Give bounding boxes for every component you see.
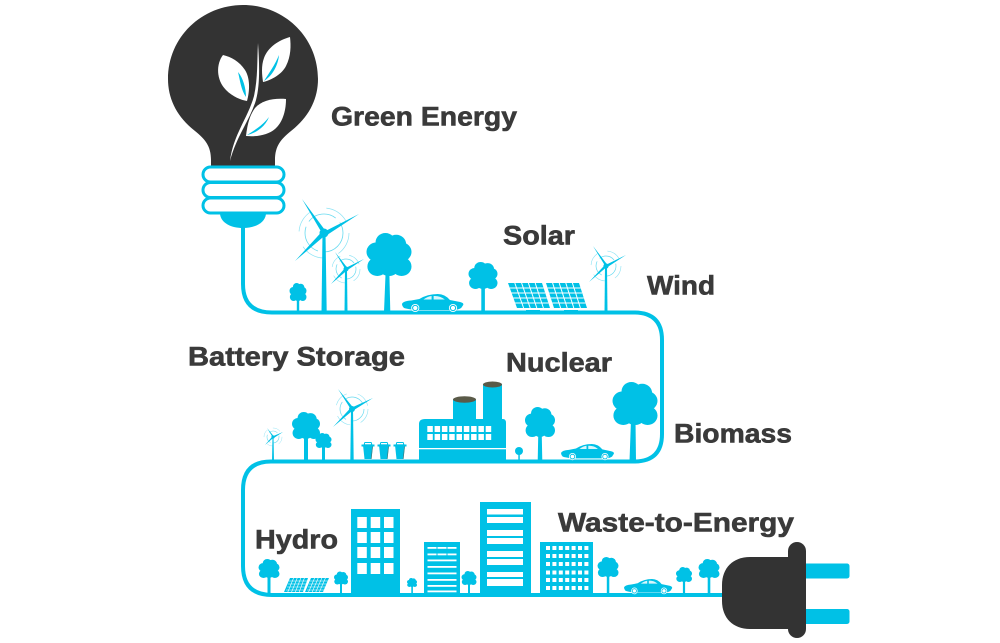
large wind turbine [295,199,359,312]
solar panel [546,283,587,312]
light bulb [168,5,318,228]
electric plug [722,542,850,638]
chimney [483,382,502,424]
label: Waste-to-Energy: Waste-to-Energy [558,508,794,538]
tree [676,567,692,595]
power cable [243,226,730,595]
label: Wind: Wind [647,270,715,300]
leaf left [218,55,249,101]
tree [292,412,320,461]
factory windows [427,426,491,440]
solar panel [508,283,550,312]
car [624,579,672,594]
bin [362,442,374,459]
tree [698,559,720,595]
plug prong [800,564,850,578]
tiny tree [515,447,523,461]
car [402,294,463,312]
slatted building [424,542,460,595]
solar panel [305,578,329,592]
tree [258,559,280,595]
tree [525,407,555,461]
label: Nuclear: Nuclear [506,348,613,378]
label: Battery Storage: Battery Storage [188,342,405,372]
title: Green Energy: Green Energy [331,102,517,132]
screw base [203,167,284,213]
tree [462,571,476,595]
bulb contact [220,214,266,228]
chimney [453,396,476,423]
tree [468,262,498,312]
tiny tree [407,578,417,595]
car [561,444,614,460]
tree [334,572,348,595]
label: Hydro: Hydro [255,524,338,554]
tree [598,557,618,595]
label: Solar: Solar [503,220,576,250]
wind turbine [589,246,626,312]
large tree [366,233,412,312]
middle row scene [264,382,658,461]
plug flange [788,542,806,638]
solar panel [284,578,308,592]
tall striped building [480,502,531,595]
leaf top right [262,37,291,82]
wind turbine [333,389,373,461]
bin [378,442,390,459]
plant stem [230,43,259,161]
bulb glass [168,5,318,167]
bin [394,442,406,459]
big tree [612,382,658,461]
office building [351,509,400,595]
dotted building [540,542,593,595]
plug body [722,557,790,629]
leaf lower right [246,99,286,136]
plug prong [800,609,850,624]
lower row scene [258,502,720,595]
small tree [316,433,332,461]
small tree [290,283,306,312]
label: Biomass: Biomass [674,418,792,448]
factory building [419,419,506,461]
small wind turbine [264,428,283,461]
factory [419,382,506,461]
medium wind turbine [331,252,364,312]
upper row scene [290,199,626,312]
